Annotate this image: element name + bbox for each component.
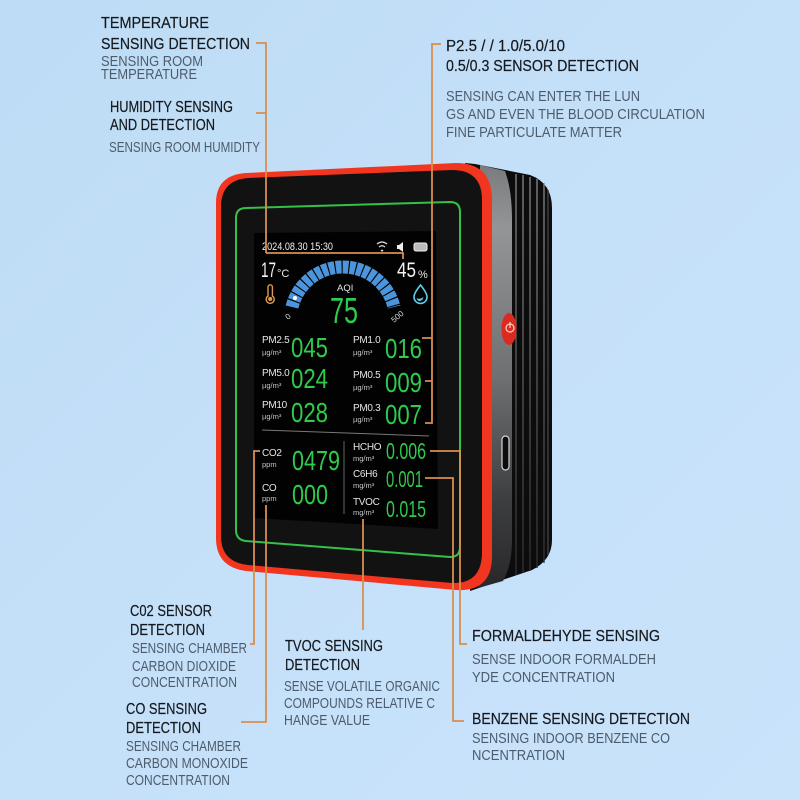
- text: CO sensing: [126, 701, 248, 789]
- gas readings: CO2: [262, 448, 282, 459]
- device: [216, 163, 552, 591]
- status bar: [262, 241, 427, 253]
- particulate readings: µg/m³: [353, 415, 373, 424]
- AQI gauge: 0: [284, 311, 293, 322]
- green outline: [236, 202, 460, 557]
- particulate readings: 028: [291, 397, 328, 428]
- status bar: 2024.08.30 15:30: [262, 241, 333, 253]
- device front with red bezel: [216, 163, 492, 590]
- text: TVOC sensing: COMPOUNDS RELATIVE C: [284, 695, 435, 712]
- text: benzene sensing: BENZENE SENSING DETECTION: [472, 711, 690, 728]
- text: humidity sensing: AND DETECTION: [110, 117, 215, 134]
- AQI gauge: [284, 267, 406, 331]
- text: CO2 sensor: C02 SENSOR: [130, 603, 212, 620]
- text: formaldehyde sensing: [472, 628, 660, 686]
- humidity reading: 45: [397, 259, 416, 282]
- text: CO2 sensor: DETECTION: [130, 622, 205, 639]
- text: TVOC sensing: TVOC SENSING: [285, 638, 383, 655]
- text: temperature sensing: SENSING ROOM: [101, 53, 203, 70]
- AQI gauge: 75: [330, 290, 358, 331]
- text: formaldehyde sensing: YDE CONCENTRATION: [472, 669, 615, 686]
- gas readings: TVOC: [353, 497, 380, 508]
- text: CO2 sensor: CARBON DIOXIDE: [132, 658, 236, 675]
- text: TVOC sensing: DETECTION: [285, 657, 360, 674]
- humidity reading: %: [418, 269, 428, 281]
- AQI gauge: AQI: [337, 283, 353, 294]
- text: particulate sensor: P2.5 / / 1.0/5.0/10: [446, 38, 565, 55]
- gas readings: 0479: [292, 445, 340, 476]
- particulate readings: PM0.3: [353, 403, 381, 414]
- gas readings: 000: [292, 479, 328, 510]
- icon: water drop: [414, 285, 427, 303]
- icon: battery: [414, 243, 427, 251]
- text: CO sensing: CONCENTRATION: [126, 772, 230, 789]
- text: CO sensing: CARBON MONOXIDE: [126, 755, 248, 772]
- text: TVOC sensing: SENSE VOLATILE ORGANIC: [284, 678, 440, 695]
- gas readings: 0.001: [386, 466, 423, 492]
- particulate readings: µg/m³: [262, 412, 282, 421]
- AQI gauge: 500: [390, 309, 406, 325]
- icon: thermometer: [266, 285, 274, 303]
- text: CO2 sensor: SENSING CHAMBER: [132, 640, 247, 657]
- screen: [254, 231, 438, 529]
- particulate readings: PM1.0: [353, 335, 381, 346]
- gas readings: mg/m³: [353, 508, 375, 517]
- particulate readings: µg/m³: [353, 383, 373, 392]
- gas readings: C6H6: [353, 469, 378, 480]
- text: particulate sensor: FINE PARTICULATE MATTER: [446, 124, 622, 141]
- gas readings: mg/m³: [353, 454, 375, 463]
- text: particulate sensor: GS AND EVEN THE BLOOD CIRCULATION: [446, 106, 705, 123]
- particulate readings: 024: [291, 363, 328, 394]
- particulate readings: PM2.5: [262, 335, 290, 346]
- gas readings: 0.015: [386, 496, 426, 522]
- text: particulate sensor: 0.5/0.3 SENSOR DETECTION: [446, 58, 639, 75]
- gas readings: ppm: [262, 494, 277, 503]
- text: CO sensing: CO SENSING: [126, 701, 207, 718]
- gas readings: mg/m³: [353, 481, 375, 490]
- particulate readings: µg/m³: [353, 348, 373, 357]
- icon: wifi: [377, 242, 387, 251]
- text: temperature sensing: TEMPERATURE: [101, 66, 197, 83]
- text: particulate sensor: SENSING CAN ENTER THE LUN: [446, 88, 640, 105]
- particulate readings: PM5.0: [262, 368, 290, 379]
- text: temperature sensing: SENSING DETECTION: [101, 36, 250, 53]
- text: formaldehyde sensing: FORMALDEHYDE SENSING: [472, 628, 660, 645]
- gas readings: [262, 438, 426, 522]
- text: CO2 sensor: [130, 603, 247, 691]
- particulate readings: 045: [291, 332, 328, 363]
- gas readings: 0.006: [386, 438, 426, 464]
- power button: [502, 313, 516, 345]
- particulate readings: 007: [385, 399, 422, 430]
- text: humidity sensing: HUMIDITY SENSING: [110, 99, 233, 116]
- text: temperature sensing: TEMPERATURE: [101, 15, 209, 32]
- text: TVOC sensing: HANGE VALUE: [284, 712, 370, 729]
- text: temperature sensing: [101, 15, 250, 83]
- particulate readings: 016: [385, 333, 422, 364]
- particulate readings: PM0.5: [353, 370, 381, 381]
- particulate readings: [262, 332, 422, 430]
- text: TVOC sensing: [284, 638, 440, 729]
- text: benzene sensing: SENSING INDOOR BENZENE CO: [472, 730, 670, 747]
- gas readings: ppm: [262, 460, 277, 469]
- temperature reading: °C: [277, 268, 289, 280]
- text: CO sensing: DETECTION: [126, 720, 201, 737]
- text: humidity sensing: SENSING ROOM HUMIDITY: [109, 139, 260, 156]
- device side with cooling fins: [465, 163, 552, 591]
- text: particulate sensor: [446, 38, 705, 141]
- text: CO2 sensor: CONCENTRATION: [132, 674, 237, 691]
- text: humidity sensing: [109, 99, 260, 156]
- icon: speaker: [397, 242, 403, 252]
- particulate readings: PM10: [262, 400, 288, 411]
- usb-c port: [502, 436, 509, 470]
- particulate readings: µg/m³: [262, 381, 282, 390]
- particulate readings: 009: [385, 367, 422, 398]
- particulate readings: µg/m³: [262, 348, 282, 357]
- text: formaldehyde sensing: SENSE INDOOR FORMALDEH: [472, 651, 656, 668]
- text: benzene sensing: NCENTRATION: [472, 747, 565, 764]
- text: CO sensing: SENSING CHAMBER: [126, 738, 241, 755]
- text: benzene sensing: [472, 711, 690, 764]
- gas readings: CO: [262, 483, 277, 494]
- gas readings: HCHO: [353, 442, 382, 453]
- leader lines: [241, 43, 467, 722]
- temperature reading: 17: [261, 259, 276, 282]
